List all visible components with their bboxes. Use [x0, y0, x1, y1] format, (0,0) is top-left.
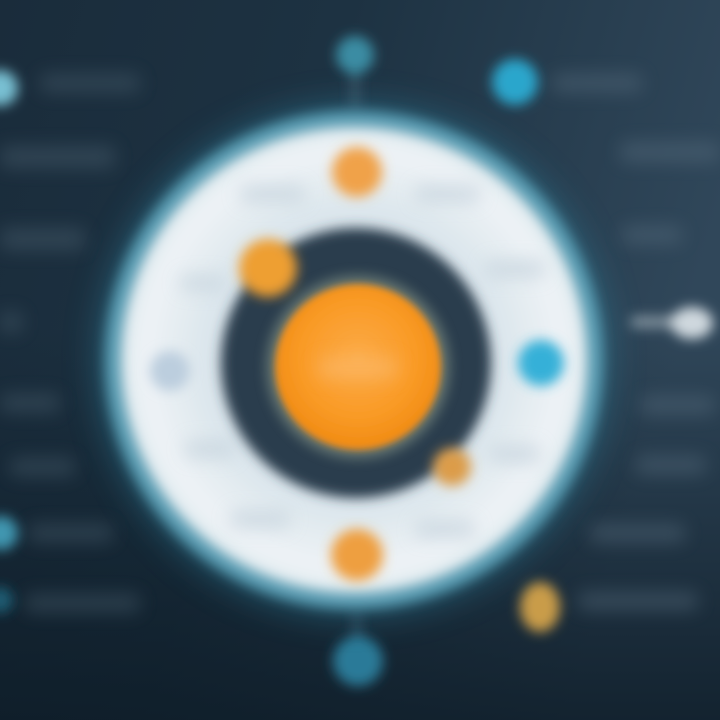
icon: right blue node	[518, 340, 564, 386]
icon: upper left orange node	[239, 239, 297, 297]
icon: left disc marker	[150, 351, 190, 391]
dark inner ring	[221, 228, 491, 498]
central label highlight	[318, 358, 398, 378]
callout: bright right label	[630, 307, 713, 339]
sphere halo	[266, 275, 450, 459]
icon: lower left edge node	[0, 516, 18, 550]
teal ring	[105, 111, 603, 609]
panel: right text lines	[552, 74, 720, 610]
white disc	[121, 127, 587, 593]
icon: bottom orange node	[331, 529, 383, 581]
outer glow ring	[96, 102, 612, 618]
orange central sphere	[275, 284, 441, 450]
panel: left text lines	[0, 74, 140, 612]
icon: bottom connector node	[333, 610, 383, 686]
icon: top left edge node	[0, 70, 18, 106]
icon: yellow lower right node	[520, 582, 560, 632]
icon: top right blue node	[492, 59, 538, 105]
icon: top connector node	[336, 36, 374, 110]
diagram: concentric circle	[96, 102, 612, 618]
icon: top orange node	[332, 147, 382, 197]
icon: bottom left edge node	[0, 587, 13, 613]
segment text smudges	[180, 185, 545, 538]
icon: lower right orange node	[433, 448, 471, 486]
